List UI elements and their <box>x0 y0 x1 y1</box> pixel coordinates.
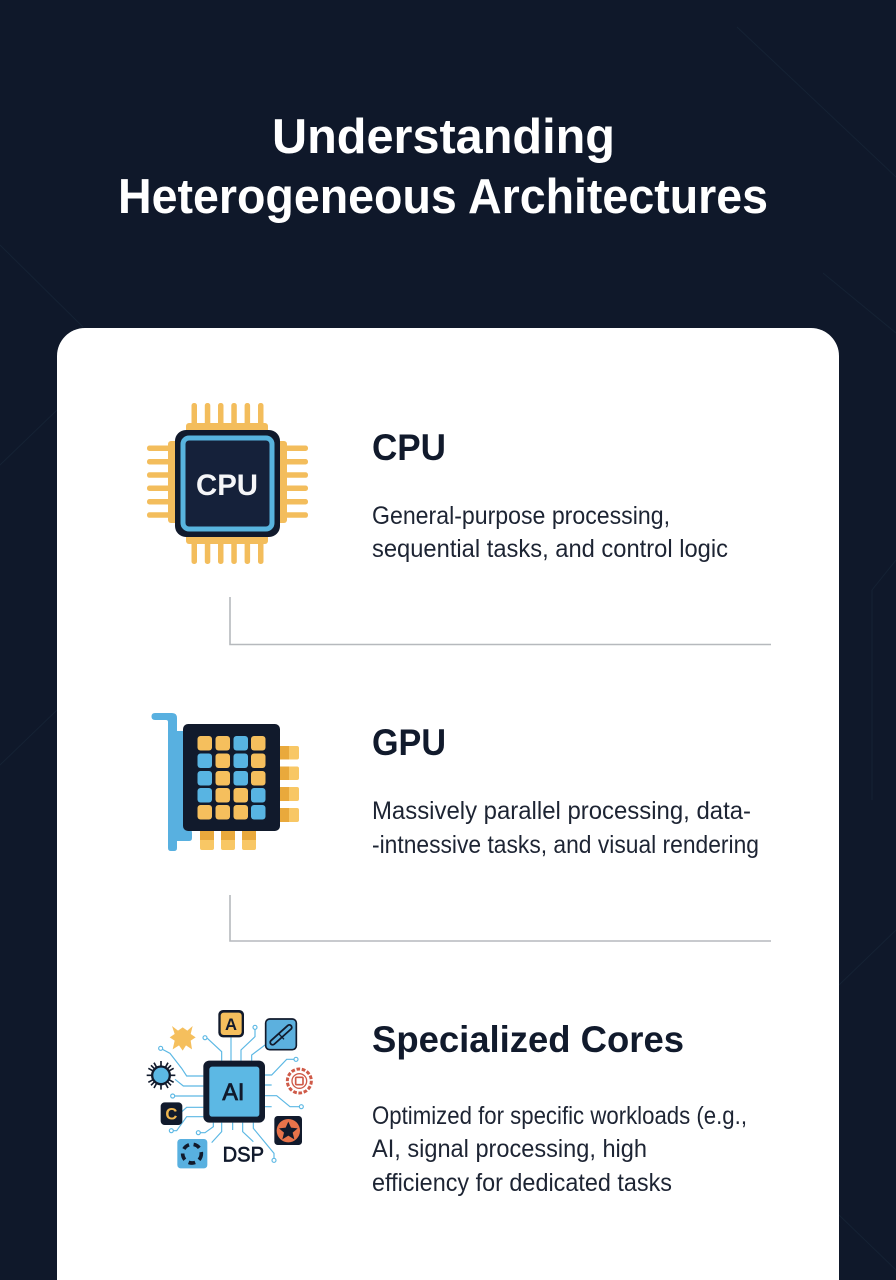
text: CPU description: General-purpose processing, <box>372 502 670 530</box>
text: Specialized Cores description: Optimized for specific workloads (e.g., <box>372 1102 747 1130</box>
title: Heterogeneous Architectures <box>118 170 768 224</box>
icon: specialized cores AI chip: DSP <box>223 1143 264 1167</box>
icon: GPU card <box>152 713 299 851</box>
icon: specialized cores AI chip <box>147 1010 311 1168</box>
text: GPU description: -intnessive tasks, and visual rendering <box>372 831 759 859</box>
text: CPU description: sequential tasks, and control logic <box>372 535 728 563</box>
icon: CPU chip: CPU <box>196 469 258 502</box>
text: Specialized Cores description: AI, signal processing, high <box>372 1135 647 1163</box>
heading: Specialized Cores: Specialized Cores <box>372 1019 684 1060</box>
text: GPU description: Massively parallel processing, data- <box>372 797 751 825</box>
connector: CPU to GPU <box>230 597 771 644</box>
connector: GPU to Specialized Cores <box>230 895 771 941</box>
icon: specialized cores AI chip: C <box>165 1104 177 1123</box>
text: CPU description <box>372 502 728 563</box>
icon: specialized cores AI chip: A <box>225 1015 237 1034</box>
text: Specialized Cores description <box>372 1102 747 1197</box>
icon: CPU chip <box>147 403 308 564</box>
panel: white card <box>57 328 839 1280</box>
text: GPU description <box>372 797 759 859</box>
title <box>118 110 768 224</box>
heading: CPU: CPU <box>372 427 446 468</box>
text: Specialized Cores description: efficiency for dedicated tasks <box>372 1169 672 1197</box>
icon: specialized cores AI chip: AI <box>222 1079 244 1106</box>
title: Understanding <box>272 110 615 164</box>
heading: GPU: GPU <box>372 722 446 763</box>
